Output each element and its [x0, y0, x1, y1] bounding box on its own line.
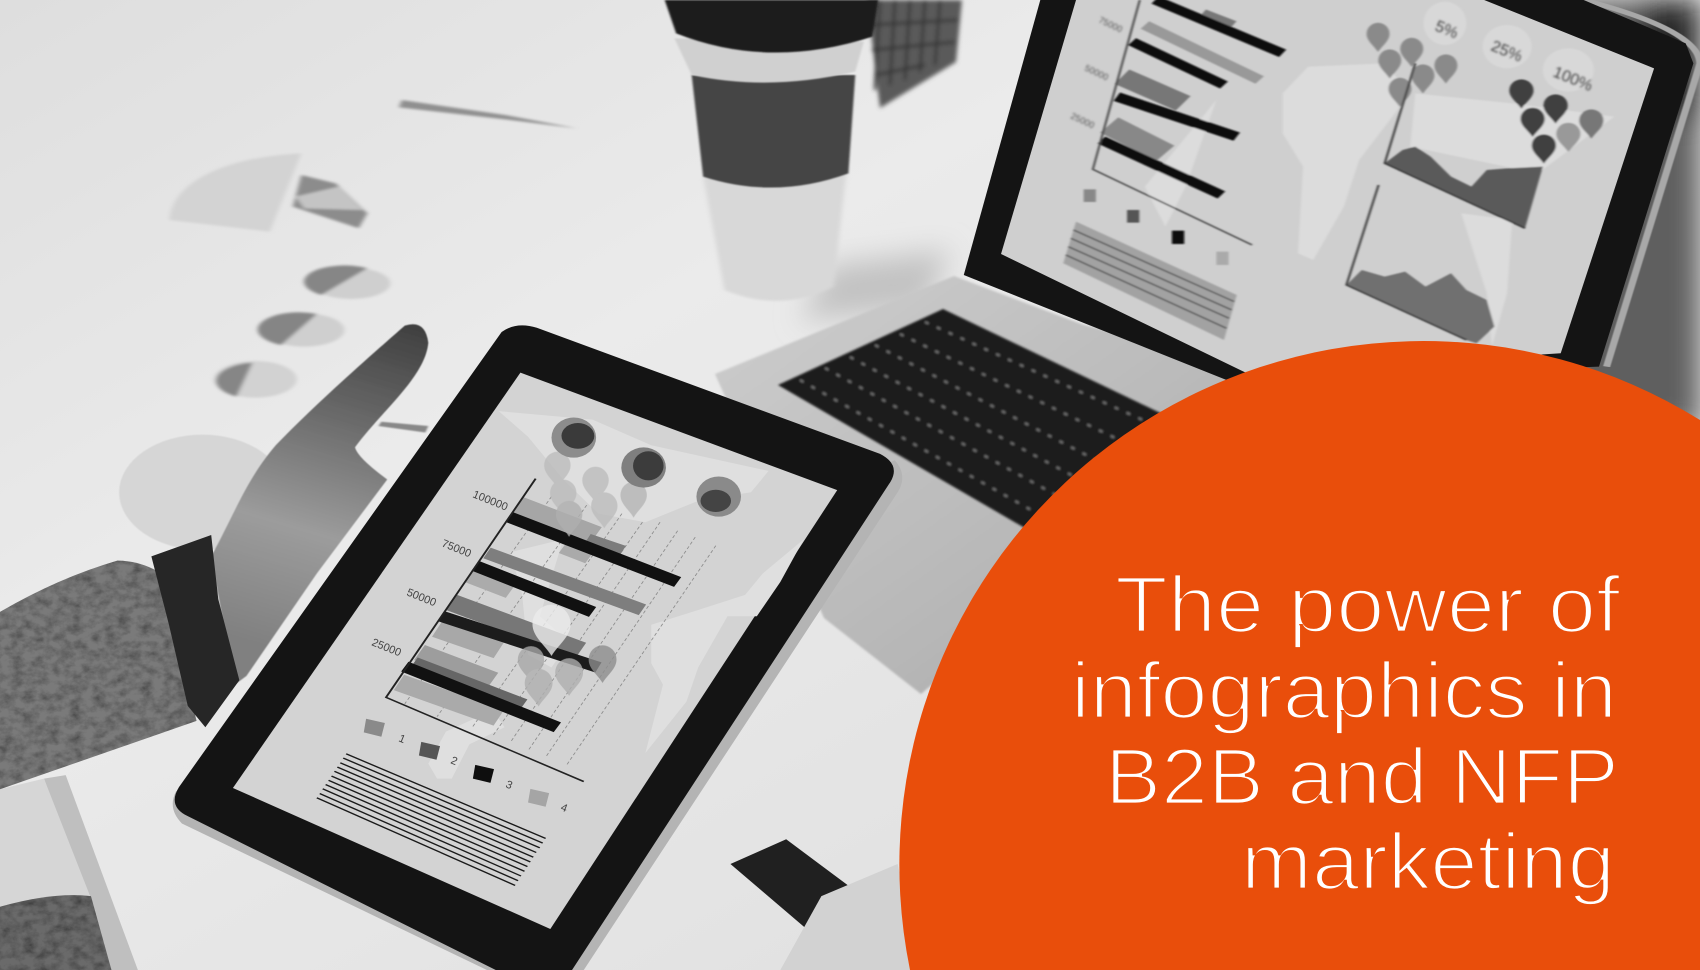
- orange circle: [899, 341, 1700, 970]
- tablet bar chart: [386, 479, 678, 782]
- laptop axis labels: 75000: [1097, 15, 1124, 34]
- laptop axis labels: 50000: [1083, 63, 1110, 82]
- tablet axis labels: 50000: [405, 587, 438, 609]
- laptop legend: [1084, 189, 1229, 265]
- title: B2B and NFP: [1105, 732, 1619, 821]
- laptop area chart lower: [1346, 185, 1494, 343]
- tablet pie icons: [551, 418, 741, 517]
- lower left sleeve: [0, 895, 111, 970]
- tablet axis labels: 75000: [440, 538, 473, 560]
- cup dark sleeve: [692, 75, 855, 188]
- cup white base: [703, 170, 847, 301]
- lower right sleeve: [780, 864, 920, 970]
- tablet legend squares: [364, 719, 549, 807]
- tablet silver edge: [173, 460, 902, 970]
- document with pie charts on desk: [169, 100, 577, 398]
- laptop striped table: [1063, 222, 1237, 340]
- laptop screen: [964, 0, 1700, 380]
- dark blurred background at top right: [1560, 0, 1700, 430]
- tablet legend numbers: 3: [504, 779, 514, 792]
- cup light band: [674, 38, 864, 83]
- title: [1071, 560, 1621, 906]
- world map on laptop: [1145, 63, 1614, 347]
- tablet display: [233, 373, 837, 929]
- tablet: [173, 325, 920, 970]
- pen holder: [867, 0, 962, 108]
- laptop percentage labels: 5%: [1433, 18, 1460, 42]
- laptop percentage labels: 25%: [1489, 38, 1525, 66]
- watch strap: [151, 535, 239, 727]
- tablet striped table: [317, 754, 546, 885]
- hand: [211, 324, 428, 685]
- laptop percentage labels: 100%: [1551, 64, 1595, 95]
- world map on tablet: [428, 411, 804, 779]
- tablet legend numbers: 1: [397, 733, 407, 746]
- laptop percentage labels: [1433, 18, 1595, 95]
- laptop base: [715, 276, 1300, 694]
- phone on desk: [730, 839, 857, 937]
- title: marketing: [1241, 817, 1615, 906]
- table surface edge: [44, 775, 138, 970]
- tablet axis labels: [370, 489, 509, 659]
- laptop axis labels: [1069, 15, 1124, 130]
- laptop area chart upper: [1385, 63, 1543, 228]
- laptop bar chart: [1093, 0, 1283, 245]
- tablet legend numbers: 4: [559, 802, 569, 815]
- laptop bezel: [964, 0, 1693, 380]
- title: The power of: [1115, 560, 1621, 649]
- laptop keyboard: [778, 309, 1175, 531]
- large pie chart behind hand: [119, 422, 428, 550]
- laptop percentage dials: [1423, 2, 1594, 92]
- cup lid: [665, 0, 878, 53]
- tablet body: [175, 325, 894, 970]
- title: infographics in: [1071, 646, 1617, 735]
- laptop map pins: [1367, 23, 1603, 164]
- laptop display: [1001, 0, 1654, 373]
- area left of the table: [0, 779, 91, 907]
- tablet map pins: [518, 452, 647, 706]
- laptop edge: [1584, 0, 1700, 367]
- cup shadow: [800, 250, 950, 320]
- tablet legend numbers: 2: [449, 755, 459, 768]
- forearm sleeve: [0, 561, 197, 789]
- tablet axis labels: 25000: [370, 637, 403, 659]
- laptop axis labels: 25000: [1069, 111, 1096, 130]
- tablet axis labels: 100000: [471, 489, 509, 514]
- coffee cup: [665, 0, 878, 301]
- left sleeve and table: [0, 324, 428, 970]
- tablet gridlines: [405, 497, 716, 766]
- tablet legend numbers: [397, 733, 569, 815]
